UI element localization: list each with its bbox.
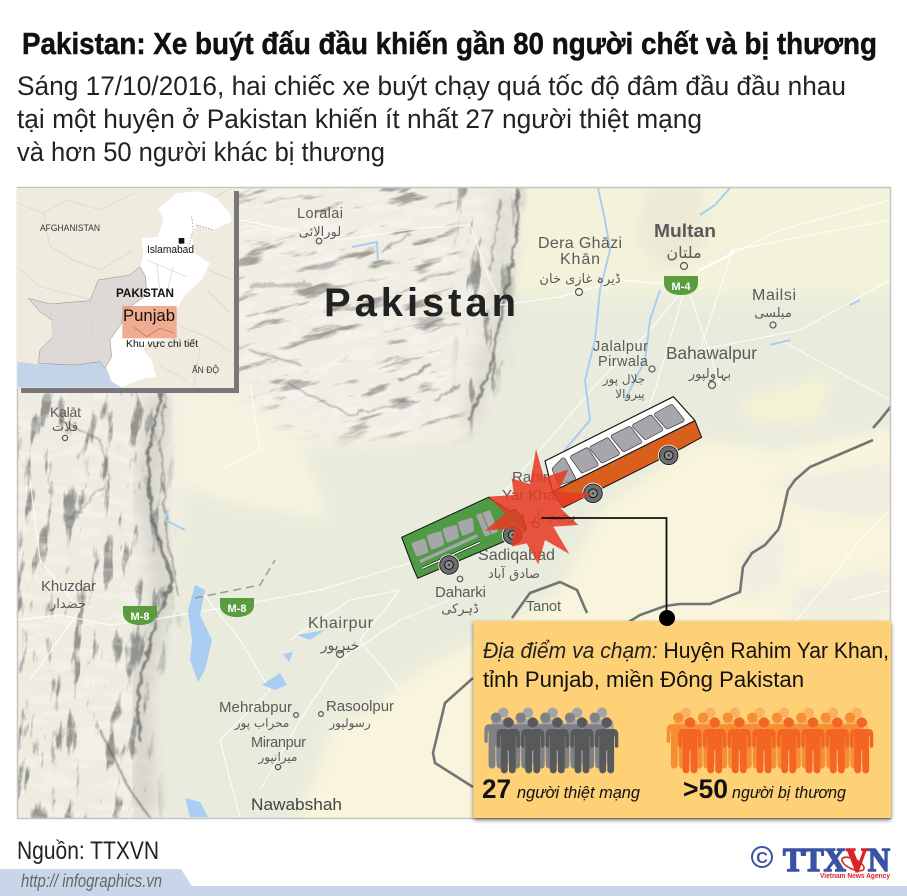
map place labels: جلال پور xyxy=(602,372,645,387)
map place labels: میلسی xyxy=(754,306,792,321)
map place labels: بہاولپور xyxy=(688,367,731,382)
map place labels: لورالائی xyxy=(299,225,341,240)
map place labels: ڈیرہ غازی خان xyxy=(539,272,621,287)
icon: group of dead, grey people xyxy=(484,708,618,773)
map panel xyxy=(16,186,892,820)
inset locator map xyxy=(17,187,239,393)
inset labels xyxy=(40,223,219,376)
icon: orange bus xyxy=(545,397,702,508)
inset sea xyxy=(17,362,122,387)
map place labels: Rahim xyxy=(512,469,555,486)
plains colour regions xyxy=(160,170,907,840)
icon: group of injured, orange people xyxy=(667,708,873,773)
inset labels: Khu vực chi tiết xyxy=(126,338,198,350)
map place labels: M-4 xyxy=(672,281,691,293)
callout panel xyxy=(474,621,891,818)
map place labels: Dera Ghāzi xyxy=(538,235,622,252)
source note: Nguồn: TTXVN xyxy=(17,837,159,865)
map place labels: Miranpur xyxy=(251,735,306,751)
mountain relief xyxy=(18,188,527,818)
callout location text xyxy=(483,638,889,692)
icon: green bus xyxy=(402,497,527,578)
map place labels: ڈہرکی xyxy=(441,602,479,617)
map place labels: خضدار xyxy=(49,597,86,612)
subtitle text block: và hơn 50 người khác bị thương xyxy=(17,137,385,167)
map place labels: Pirwala xyxy=(598,354,649,370)
stat: 27 dead: người thiệt mạng xyxy=(517,784,641,802)
inset capital marker xyxy=(179,238,184,244)
footer band xyxy=(0,869,907,896)
map place labels: Pakistan xyxy=(324,281,516,325)
map place labels: محراب پور xyxy=(234,716,289,731)
connector line to callout xyxy=(542,518,675,626)
map place labels: میرانپور xyxy=(258,750,297,765)
map place labels: Sadiqabad xyxy=(478,547,555,564)
map place labels: Khuzdar xyxy=(41,578,96,595)
map place labels: خیرپور xyxy=(320,638,359,654)
subtitle text block: tại một huyện ở Pakistan khiến ít nhất 27 người thiệt mạng xyxy=(17,104,702,134)
callout location text: Địa điểm va chạm: Huyện Rahim Yar Khan, xyxy=(483,638,889,663)
footer band: http:// infographics.vn xyxy=(21,871,162,891)
inset labels: Punjab xyxy=(123,306,175,325)
map place labels: Khairpur xyxy=(308,615,374,632)
map place labels: قلات xyxy=(52,420,78,435)
inset labels: Islamabad xyxy=(147,244,194,256)
map place labels xyxy=(41,206,796,814)
stat: 27 dead: 27 xyxy=(482,774,511,804)
map place labels: Kalāt xyxy=(50,404,81,420)
logo: TTXVN: C xyxy=(756,850,768,867)
map place labels: M-8 xyxy=(228,603,246,615)
roads xyxy=(18,200,890,818)
map place labels: Nawabshah xyxy=(251,795,342,814)
dashed disputed line xyxy=(195,560,275,598)
inset labels: PAKISTAN xyxy=(116,288,174,300)
icon: explosion xyxy=(485,449,592,564)
stat: over 50 injured xyxy=(683,774,847,804)
logo: TTXVN: TTXVN xyxy=(783,842,890,879)
map place labels: Khān xyxy=(560,251,600,268)
map place labels: پیروالا xyxy=(615,387,645,402)
international border xyxy=(433,405,892,787)
map place labels: Daharki xyxy=(435,584,486,601)
rivers and lakes xyxy=(165,188,860,817)
map place labels: صادق آباد xyxy=(488,565,540,582)
map place labels: Loralai xyxy=(297,206,343,222)
inset Pakistan white area xyxy=(28,191,232,387)
map place labels: Multan xyxy=(654,221,716,241)
inset neighbour roads xyxy=(17,187,233,387)
map place labels: رحیم یار خان xyxy=(505,509,575,524)
callout location text: tỉnh Punjab, miền Đông Pakistan xyxy=(483,667,804,692)
map place labels: Tanot xyxy=(526,599,561,615)
map place labels: M-8 xyxy=(131,611,149,623)
stat: over 50 injured: người bị thương xyxy=(732,784,847,802)
map place labels: Bahawalpur xyxy=(666,343,757,363)
inset labels: AFGHANISTAN xyxy=(40,223,100,233)
map place labels: ملتان xyxy=(666,243,702,262)
map place labels: Mailsi xyxy=(752,287,796,304)
subtitle text block xyxy=(17,71,846,167)
stat: 27 dead xyxy=(482,774,641,804)
map place labels: Mehrabpur xyxy=(219,699,292,716)
subtitle text block: Sáng 17/10/2016, hai chiếc xe buýt chạy quá tốc độ đâm đầu đầu nhau xyxy=(17,71,846,101)
map place labels: Yar Khan xyxy=(502,487,563,504)
map place labels: Rasoolpur xyxy=(326,698,394,715)
logo: TTXVN: Vietnam News Agency xyxy=(820,871,891,880)
collision illustration xyxy=(402,397,702,578)
map place labels: Jalalpur xyxy=(593,339,648,355)
inset labels: ẤN ĐỘ xyxy=(192,365,219,376)
stat: over 50 injured: >50 xyxy=(683,774,728,804)
inset Balochistan xyxy=(28,267,147,368)
map place labels: رسولپور xyxy=(328,716,371,731)
inset detail area xyxy=(122,306,177,338)
